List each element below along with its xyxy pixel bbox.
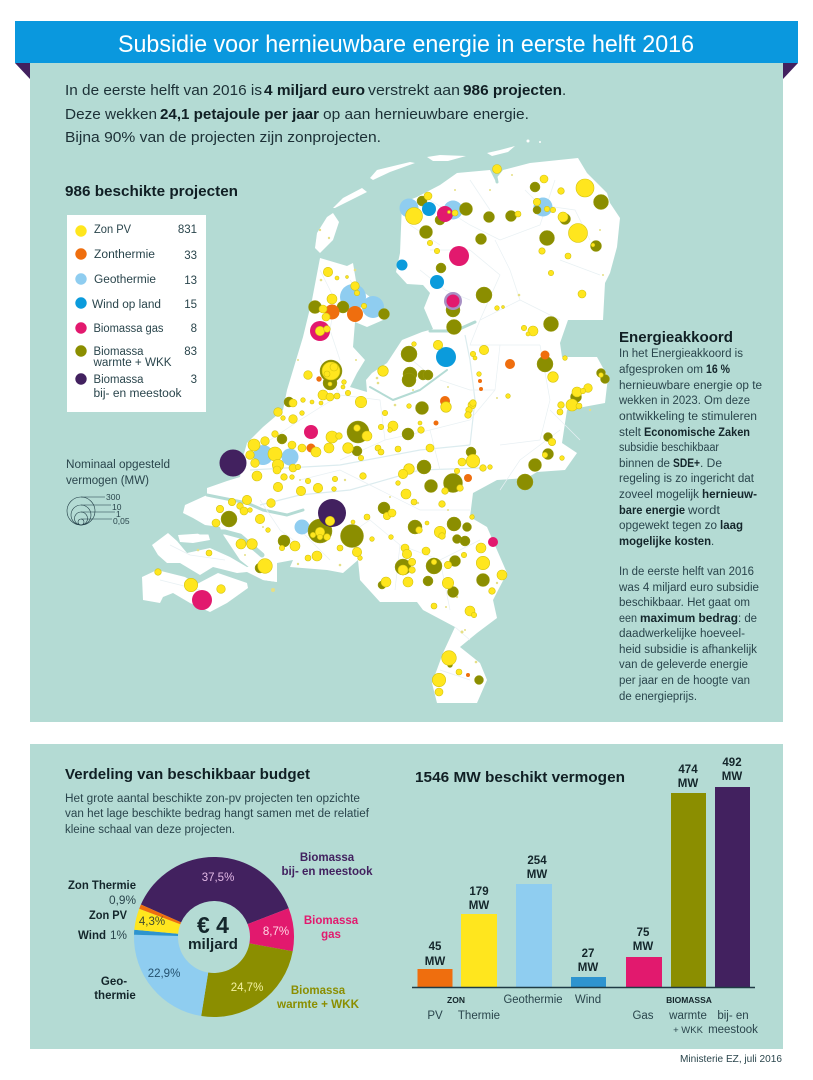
budget heading: Verdeling van beschikbaar budget — [65, 766, 310, 783]
donut percentages: 37,5% — [202, 872, 234, 884]
text block: Energieakkoord: mogelijke kosten — [619, 536, 711, 548]
legend counts: 33 — [184, 250, 197, 262]
bar values: MW — [527, 869, 547, 881]
text block: Energieakkoord: In de eerste helft van 2016 — [619, 566, 754, 578]
legend labels: Biomassa — [94, 346, 144, 358]
bar values: MW — [633, 941, 653, 953]
intro text: In de eerste helft van 2016 is — [65, 82, 262, 99]
intro text: 986 projecten — [463, 82, 562, 99]
text block: Energieakkoord: laag — [720, 520, 743, 532]
intro text: verstrekt aan — [368, 82, 460, 99]
legend counts: 3 — [191, 374, 197, 386]
donut category labels — [68, 852, 373, 1011]
inland water — [193, 172, 497, 555]
legend labels: Zon PV — [94, 224, 131, 236]
bar axis labels: PV — [427, 1010, 443, 1022]
bar values: MW — [425, 956, 445, 968]
bar values: 179 — [469, 886, 489, 898]
intro text: Deze wekken — [65, 106, 157, 123]
text block: Energieakkoord: hernieuwbare energie op te — [619, 380, 762, 392]
text block: Energieakkoord — [618, 329, 762, 703]
geothermie projects — [253, 198, 552, 534]
donut category labels: Biomassa — [304, 915, 359, 927]
budget text: kleine schaal van deze projecten. — [65, 824, 235, 836]
legend counts: 15 — [184, 299, 197, 311]
text block: Energieakkoord: beschikbaar. Het gaat om — [619, 597, 750, 609]
donut category labels: Geo- — [101, 976, 127, 988]
text block: Energieakkoord: bare energie — [619, 505, 685, 517]
budget text — [65, 793, 370, 836]
intro text: 24,1 petajoule per jaar — [160, 106, 319, 123]
legend counts: 13 — [184, 275, 197, 287]
text block: Energieakkoord: wekken in 2023. Om deze — [618, 395, 750, 407]
bar values: 45 — [429, 941, 442, 953]
bar values: 492 — [722, 757, 742, 769]
text block: Energieakkoord: binnen de — [619, 458, 670, 470]
legend labels: Biomassa — [94, 374, 144, 386]
text block: Energieakkoord: 16 % — [706, 364, 730, 376]
bar values: 27 — [582, 948, 594, 960]
legend counts — [178, 224, 197, 386]
bar axis labels: bij- en — [717, 1010, 749, 1022]
donut category labels: 1% — [110, 930, 127, 942]
donut category labels: Biomassa — [300, 852, 355, 864]
intro text: Bijna 90% van de projecten zijn zonprojecten. — [65, 129, 381, 146]
bar values: MW — [469, 900, 489, 912]
legend counts: 8 — [191, 323, 197, 335]
bar values: 474 — [678, 764, 698, 776]
bar values: MW — [722, 771, 742, 783]
source: Ministerie EZ, juli 2016 — [680, 1053, 782, 1065]
donut percentages: 4,3% — [139, 916, 165, 928]
bar axis labels: Thermie — [458, 1010, 500, 1022]
wind op land projects — [396, 202, 456, 367]
zonthermie projects — [306, 304, 550, 677]
donut percentages: 24,7% — [231, 982, 263, 994]
text block: Energieakkoord: zoveel mogelijk — [619, 489, 699, 501]
donut category labels: gas — [321, 929, 341, 941]
text block: Energieakkoord: maximum bedrag — [640, 613, 738, 625]
map of the Netherlands with projects — [142, 140, 620, 703]
text block: Energieakkoord: Economische Zaken — [644, 427, 750, 439]
text block: Energieakkoord: Energieakkoord — [619, 329, 733, 346]
intro text: op aan hernieuwbare energie. — [323, 106, 529, 123]
title ribbon — [15, 21, 798, 79]
bar axis labels: Gas — [632, 1010, 654, 1022]
biomassa bij- en meestook projects — [220, 292, 462, 527]
legend labels: Geothermie — [94, 274, 156, 286]
donut category labels: Biomassa — [291, 985, 346, 997]
text block: Energieakkoord: was 4 miljard euro subsidie — [618, 582, 759, 594]
text block: Energieakkoord: daadwerkelijke hoeveel- — [619, 628, 745, 640]
donut category labels: warmte + WKK — [276, 999, 360, 1011]
title: Subsidie voor hernieuwbare energie in eerste helft 2016 — [118, 31, 694, 58]
zon PV projects — [155, 164, 603, 696]
bar values: 254 — [527, 855, 547, 867]
top panel background — [30, 63, 783, 722]
text block: Energieakkoord: regeling is zo ingericht dat — [619, 473, 755, 485]
donut percentages — [139, 872, 289, 994]
text block: Energieakkoord: de energieprijs. — [619, 691, 697, 703]
bar values: MW — [678, 778, 698, 790]
bar values: MW — [578, 962, 598, 974]
text block: Energieakkoord: . — [711, 536, 714, 548]
size legend: Nominaal opgesteld — [66, 459, 170, 471]
section heading: projects: 986 beschikte projecten — [65, 183, 238, 200]
donut category labels: bij- en meestook — [282, 866, 373, 878]
legend labels: Zonthermie — [94, 249, 155, 261]
legend labels: warmte + WKK — [92, 357, 172, 369]
text block: Energieakkoord: stelt — [619, 427, 642, 439]
bottom panel background — [30, 744, 783, 1049]
legend labels: bij- en meestook — [94, 388, 182, 400]
donut category labels: thermie — [94, 990, 136, 1002]
donut percentages: 8,7% — [263, 926, 289, 938]
text block: Energieakkoord: wordt — [687, 505, 721, 517]
donut centre label: € 4 — [197, 912, 229, 938]
biomassa gas projects — [192, 206, 498, 610]
donut category labels: 0,9% — [109, 895, 136, 907]
text block: Energieakkoord: SDE+ — [673, 458, 700, 470]
bar values: 75 — [637, 927, 650, 939]
bar axis labels: warmte — [668, 1010, 707, 1022]
budget text: Het grote aantal beschikte zon-pv projecten ten opzichte — [65, 793, 360, 805]
bar axis labels: + WKK — [673, 1025, 704, 1036]
intro text: 4 miljard euro — [264, 82, 365, 99]
donut category labels: Zon PV — [89, 910, 127, 922]
donut percentages: 22,9% — [148, 968, 180, 980]
bar axis labels: meestook — [708, 1024, 758, 1036]
legend labels — [92, 224, 182, 400]
text block: Energieakkoord: : de — [738, 613, 757, 625]
size legend: 10 — [112, 502, 122, 512]
donut centre label — [188, 912, 238, 953]
size legend — [66, 459, 170, 526]
bar values — [425, 757, 742, 974]
text block: Energieakkoord: subsidie beschikbaar — [619, 442, 719, 454]
text block: Energieakkoord: afgesproken om — [619, 364, 703, 376]
donut category labels: Zon Thermie — [68, 880, 136, 892]
bar axis labels: ZON — [447, 995, 465, 1005]
bar axis labels — [427, 994, 758, 1036]
budget text: van het lage beschikte bedrag hangt samen met de relatief — [65, 808, 370, 820]
legend labels: Wind op land — [92, 299, 161, 311]
biomassa warmte + WKK projects — [221, 182, 610, 684]
land — [142, 140, 620, 703]
size legend: vermogen (MW) — [66, 475, 149, 487]
donut category labels: Wind — [78, 930, 106, 942]
text block: Energieakkoord: van de geleverde energie — [619, 659, 748, 671]
text block: Energieakkoord: opgewekt tegen zo — [619, 520, 717, 532]
donut centre label: miljard — [188, 936, 238, 953]
size legend: 300 — [106, 492, 120, 502]
tiny project dots — [197, 174, 604, 663]
text block: Energieakkoord: . De — [700, 458, 722, 470]
legend counts: 83 — [184, 346, 197, 358]
text block: Energieakkoord: In het Energieakkoord is — [619, 348, 743, 360]
rivers and boundaries — [160, 180, 600, 680]
intro text — [65, 82, 566, 146]
legend — [67, 215, 206, 412]
text block: Energieakkoord: een — [619, 613, 637, 625]
legend labels: Biomassa gas — [94, 323, 164, 335]
bar axis labels: BIOMASSA — [666, 995, 712, 1005]
bar chart — [412, 757, 758, 1036]
text block: Energieakkoord: hernieuw- — [702, 489, 757, 501]
bar axis labels: Wind — [575, 994, 601, 1006]
text block: Energieakkoord: per jaar en de hoogte van — [619, 675, 750, 687]
size legend: 1 — [116, 509, 121, 519]
legend counts: 831 — [178, 224, 197, 236]
text block: Energieakkoord: ontwikkeling te stimuleren — [619, 411, 757, 423]
size legend: 0,05 — [113, 516, 130, 526]
capacity heading: 1546 MW beschikt vermogen — [415, 769, 625, 786]
text block: Energieakkoord: heid subsidie is afhankelijk — [619, 644, 757, 656]
intro text: . — [562, 82, 566, 99]
donut chart — [134, 857, 294, 1017]
bar axis labels: Geothermie — [504, 994, 562, 1006]
legend symbols — [75, 225, 87, 385]
